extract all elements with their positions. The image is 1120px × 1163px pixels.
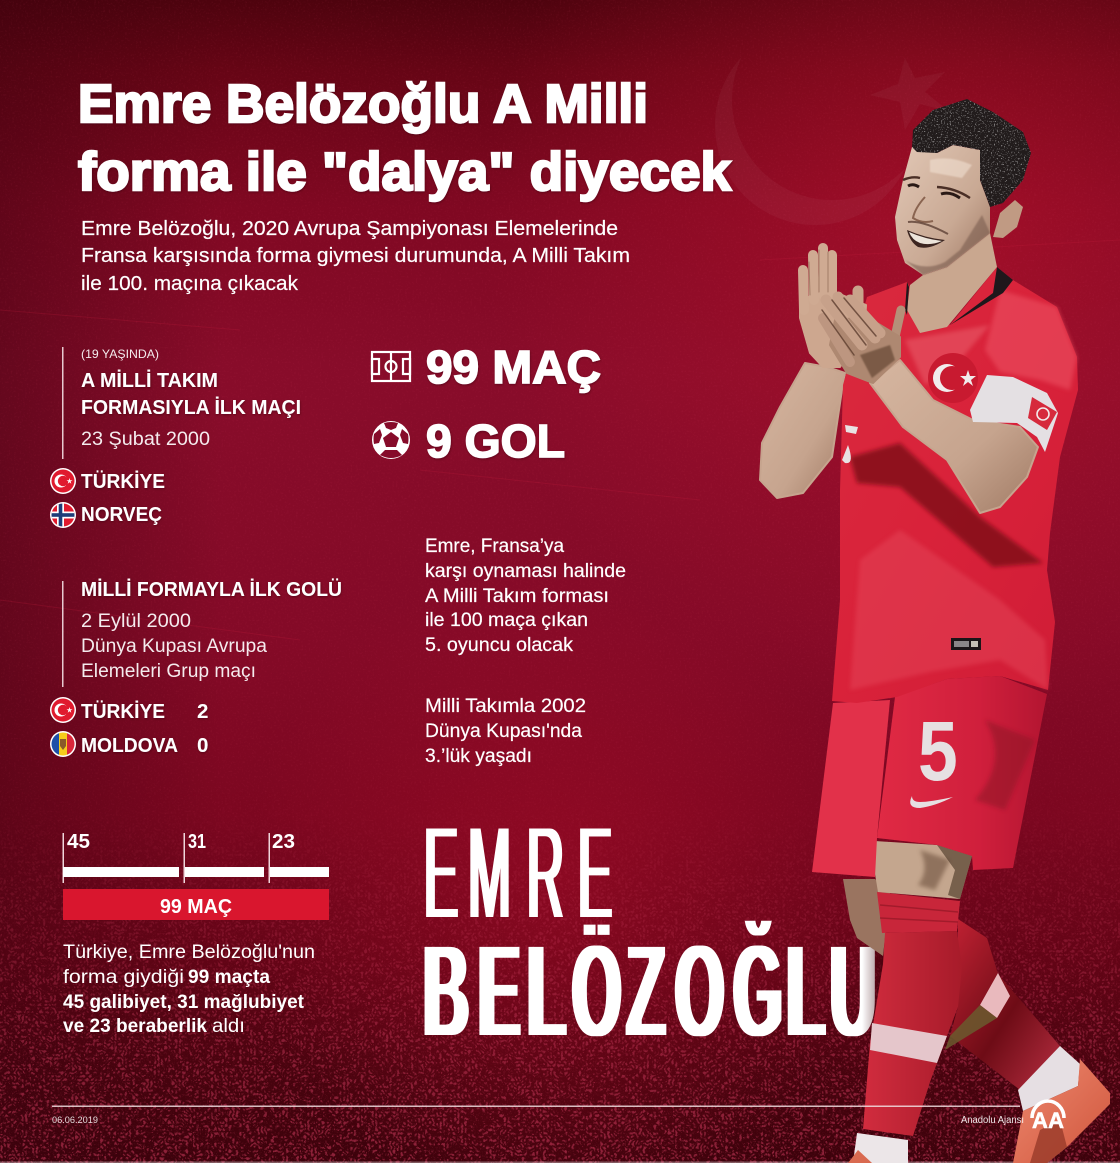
front sock xyxy=(848,892,962,1163)
text: 2002 World Cup note xyxy=(425,696,586,767)
bar values xyxy=(67,831,295,853)
text: 100th match note: karşı oynaması halinde xyxy=(425,561,626,582)
text: results summary: ve 23 beraberlik xyxy=(63,1016,207,1037)
thumb xyxy=(895,310,901,337)
swoosh xyxy=(910,796,953,808)
first goal details: Elemeleri Grup maçı xyxy=(81,661,256,682)
face features xyxy=(903,158,990,275)
jersey tag xyxy=(951,638,981,650)
text: results summary: aldı xyxy=(212,1016,245,1037)
intro text: Emre Belözoğlu, 2020 Avrupa Şampiyonası Elemelerinde xyxy=(81,217,618,240)
back thigh xyxy=(843,879,890,956)
flag: Norway xyxy=(50,502,76,528)
panel: first match xyxy=(50,347,301,528)
flag: Türkiye xyxy=(50,697,76,723)
text: 100th match note: 5. oyuncu olacak xyxy=(425,635,574,656)
bar values: 45 xyxy=(67,831,90,853)
text: results summary: 99 maçta xyxy=(188,967,270,988)
text: results summary: 45 galibiyet, 31 mağlubiyet xyxy=(63,992,305,1013)
player photo illustration xyxy=(760,99,1110,1163)
first match heading xyxy=(81,369,301,419)
text: 2002 World Cup note: 3.’lük yaşadı xyxy=(425,746,532,767)
icon: football xyxy=(372,421,410,459)
footer line xyxy=(52,1106,1020,1107)
crest xyxy=(928,353,978,403)
stat: 99 matches xyxy=(372,341,601,393)
team: Türkiye: TÜRKİYE xyxy=(81,470,165,493)
total bar xyxy=(63,889,329,920)
text: 100th match note xyxy=(425,536,626,656)
text: results summary: forma giydiği xyxy=(63,967,184,988)
score: Moldova 0: 0 xyxy=(197,734,208,757)
panel: first goal xyxy=(50,578,342,757)
stat text: 9 GOL xyxy=(426,415,565,467)
stat: 9 goals xyxy=(372,415,565,467)
text: 100th match note: ile 100 maça çıkan xyxy=(425,610,588,631)
icon: football pitch xyxy=(372,352,410,381)
stat text: 99 MAÇ xyxy=(426,341,601,393)
score: Türkiye 2: 2 xyxy=(197,700,208,723)
title: Emre Belözoğlu A Milli xyxy=(78,74,648,134)
forearm shadow xyxy=(850,443,1043,567)
first goal details: 2 Eylül 2000 xyxy=(81,611,191,632)
bar segments xyxy=(63,867,329,877)
shorts number 5: 5 xyxy=(918,703,958,798)
flag: Moldova xyxy=(50,731,76,757)
name: EMRE: EMRE xyxy=(424,801,612,947)
captain armband xyxy=(970,375,1058,452)
logo: AA: AA xyxy=(1032,1108,1064,1133)
title: forma ile "dalya" diyecek xyxy=(78,142,732,202)
number on back side xyxy=(842,425,858,463)
text: 100th match note: A Milli Takım forması xyxy=(425,586,609,607)
hair xyxy=(912,99,1031,207)
chart: results bar xyxy=(62,831,329,920)
intro text: ile 100. maçına çıkacak xyxy=(81,272,299,295)
front thigh xyxy=(875,841,972,899)
name: BELÖZOĞLU: BELÖZOĞLU xyxy=(423,917,876,1066)
team: Norveç: NORVEÇ xyxy=(81,503,162,526)
text: results summary xyxy=(63,942,315,1037)
shorts xyxy=(812,676,1047,877)
neck xyxy=(907,233,997,333)
shadow behind leg xyxy=(862,944,884,1036)
jersey xyxy=(832,267,1078,703)
face xyxy=(895,145,990,275)
text: 2002 World Cup note: Dünya Kupası'nda xyxy=(425,721,582,742)
ear xyxy=(993,200,1023,238)
credit: Anadolu Ajansı xyxy=(961,1115,1024,1126)
first match heading: FORMASIYLA İLK MAÇI xyxy=(81,396,301,419)
back hand xyxy=(800,248,866,367)
first match heading: A MİLLİ TAKIM xyxy=(81,369,218,392)
back leg xyxy=(945,919,1060,1090)
left arm xyxy=(760,363,845,498)
text: 2002 World Cup note: Milli Takımla 2002 xyxy=(425,696,586,717)
back sock and boot xyxy=(1013,1046,1110,1163)
bar values: 23 xyxy=(272,831,295,853)
text: results summary: Türkiye, Emre Belözoğlu'nun xyxy=(63,942,315,963)
first goal details xyxy=(81,611,267,682)
first goal details: Dünya Kupası Avrupa xyxy=(81,636,267,657)
first match date: 23 Şubat 2000 xyxy=(81,429,210,450)
date: 06.06.2019 xyxy=(52,1115,98,1126)
bar values: 31 xyxy=(188,831,206,853)
total bar: 99 MAÇ xyxy=(160,896,232,918)
text: 100th match note: Emre, Fransa’ya xyxy=(425,536,564,557)
upper arm and forearm xyxy=(870,360,1038,513)
background crescent and star xyxy=(715,59,944,225)
intro text: Fransa karşısında forma giymesi durumunda, A Milli Takım xyxy=(81,244,630,267)
score: Türkiye 2: TÜRKİYE xyxy=(81,700,165,723)
score: Moldova 0: MOLDOVA xyxy=(81,734,178,757)
back hand thumb xyxy=(852,291,864,316)
first goal heading: MİLLİ FORMAYLA İLK GOLÜ xyxy=(81,578,342,601)
title xyxy=(78,74,732,202)
age note: (19 YAŞINDA) xyxy=(81,347,159,361)
collar xyxy=(950,267,1013,325)
front hand xyxy=(822,297,900,383)
intro text xyxy=(81,217,630,295)
flag: Türkiye xyxy=(50,468,76,494)
